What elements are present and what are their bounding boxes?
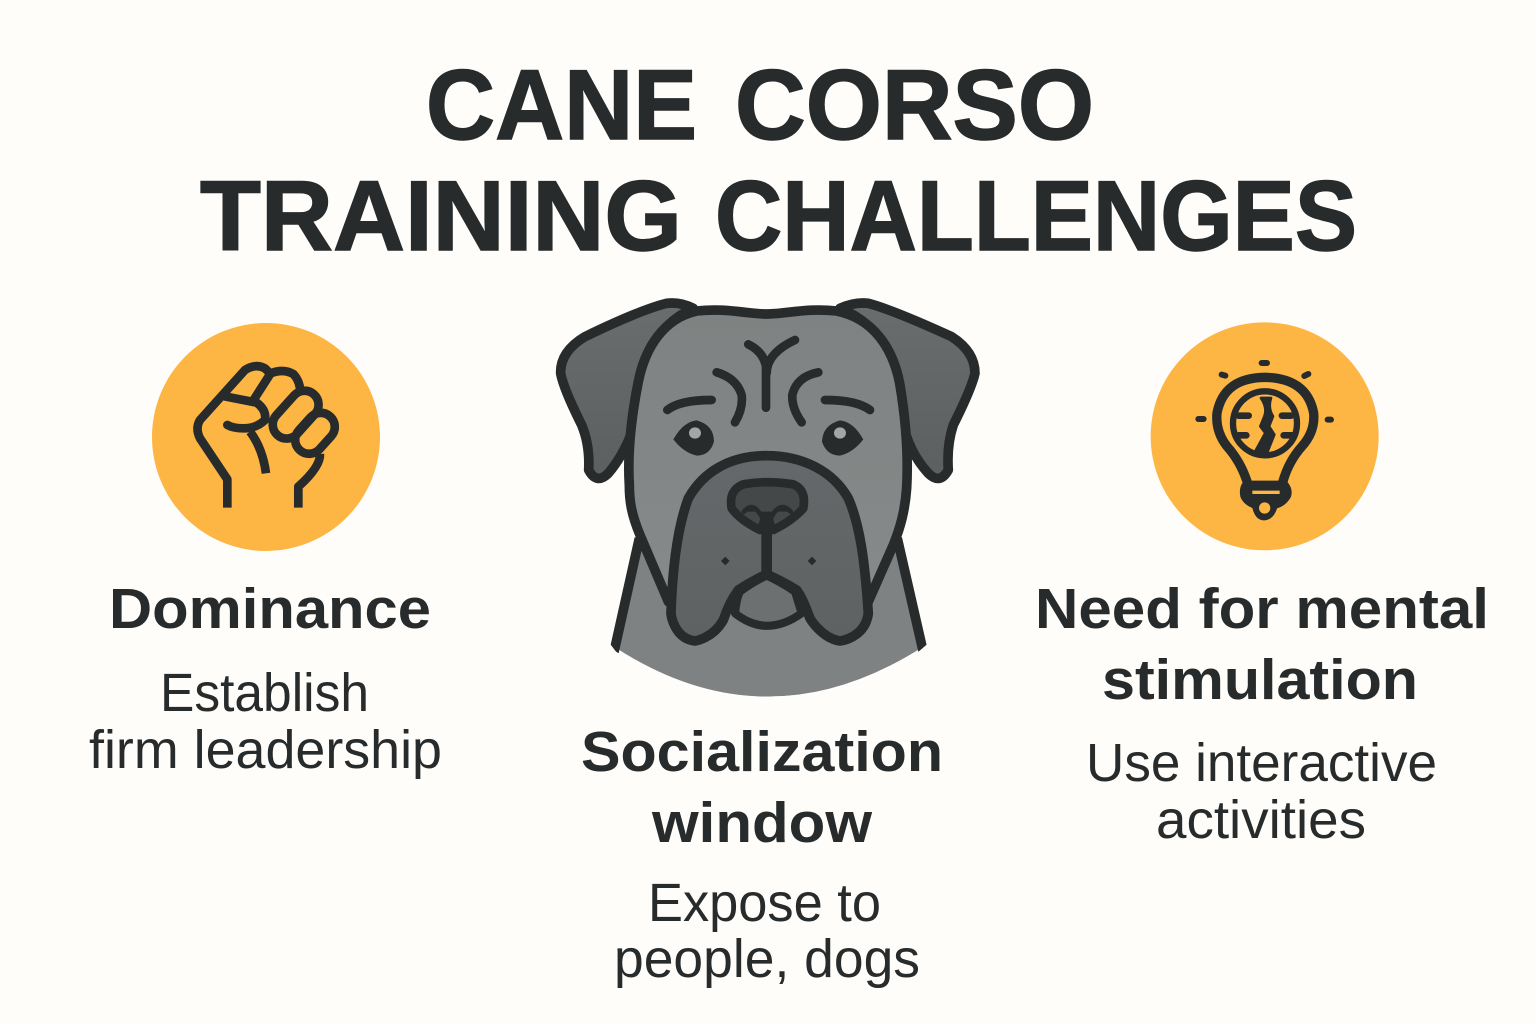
text: dominance advice: Establish (160, 663, 369, 723)
icon: raised fist (152, 323, 380, 551)
mouth (735, 576, 802, 626)
panel: mental stimulation (1035, 322, 1489, 850)
title: CORSO (735, 49, 1094, 160)
text: socialization advice (614, 873, 920, 989)
text: mental stimulation advice: activities (1156, 790, 1366, 850)
left ear (561, 303, 693, 478)
heading: need for mental stimulation: stimulation (1102, 648, 1418, 712)
title: TRAINING (200, 160, 682, 271)
heading: socialization window: window (651, 791, 873, 855)
whisker dots (721, 557, 816, 565)
panel: socialization (581, 720, 943, 989)
left eye (673, 420, 714, 456)
head (629, 310, 907, 602)
title (200, 49, 1357, 271)
panel: dominance (89, 323, 442, 780)
heading: socialization window: Socialization (581, 720, 943, 784)
text: socialization advice: people, dogs (614, 929, 920, 989)
text: dominance advice: firm leadership (89, 720, 442, 780)
icon: dog head (540, 303, 1000, 705)
title: CANE (426, 49, 697, 160)
text: dominance advice (89, 663, 442, 780)
title: CHALLENGES (715, 160, 1357, 271)
heading: need for mental stimulation (1035, 577, 1489, 712)
neck (614, 532, 923, 697)
heading: socialization window (581, 720, 943, 855)
nose (731, 482, 804, 530)
right eye (822, 420, 863, 456)
heading: need for mental stimulation: Need for mental (1035, 577, 1489, 641)
text: socialization advice: Expose to (648, 873, 881, 933)
muzzle (671, 456, 868, 641)
right ear (840, 303, 975, 478)
text: mental stimulation advice (1086, 733, 1437, 850)
brow wrinkles (667, 340, 870, 422)
icon: light bulb with brain (1151, 322, 1379, 550)
text: mental stimulation advice: Use interactive (1086, 733, 1437, 793)
heading: dominance: Dominance (109, 577, 431, 641)
